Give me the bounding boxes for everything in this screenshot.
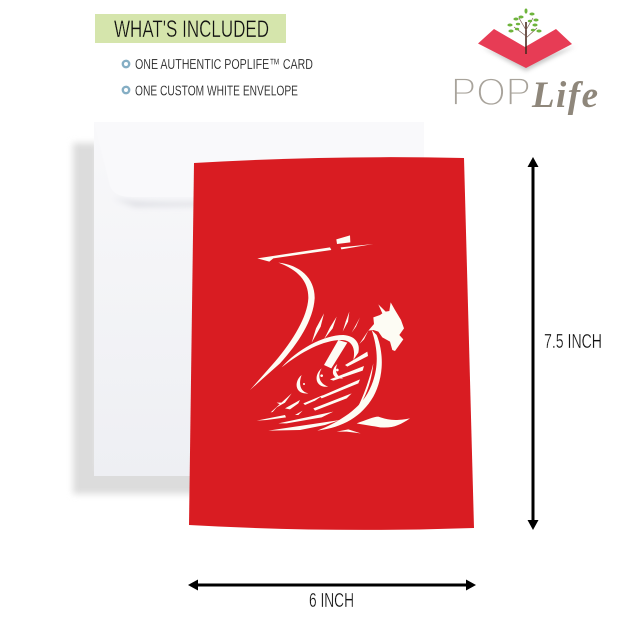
red pop-up card xyxy=(189,157,474,530)
list of included items: ONE AUTHENTIC POPLIFE™ CARD xyxy=(135,56,313,73)
oar blades low xyxy=(271,393,292,412)
shields xyxy=(297,375,308,393)
heading: what's included: WHAT'S INCLUDED xyxy=(114,16,269,43)
logo wordmark POP: POP xyxy=(451,71,531,114)
logo: PopLife xyxy=(451,8,598,116)
label: 6 inch: 6 INCH xyxy=(309,590,354,612)
hull planks xyxy=(345,352,368,367)
gunwale arc xyxy=(282,335,359,367)
stern curve xyxy=(250,263,315,390)
heading: what's included xyxy=(95,14,286,43)
white envelope xyxy=(94,122,424,476)
list of included items xyxy=(123,56,313,100)
arrow: width dimension xyxy=(188,580,476,590)
neck and prow xyxy=(317,330,382,431)
rower xyxy=(324,340,347,368)
oars xyxy=(312,313,324,343)
list of included items: ONE CUSTOM WHITE ENVELOPE xyxy=(135,82,298,100)
arrow: height dimension xyxy=(528,157,538,530)
logo open book with tree xyxy=(478,8,576,71)
envelope flap shadow xyxy=(112,198,200,207)
logo wordmark Life: Life xyxy=(531,75,598,116)
mast and sail spar xyxy=(257,247,331,262)
tail flame xyxy=(357,417,410,428)
envelope shadow xyxy=(73,143,200,494)
envelope flap xyxy=(94,122,424,197)
dragon head xyxy=(368,302,404,351)
viking ship cutout xyxy=(250,235,410,433)
